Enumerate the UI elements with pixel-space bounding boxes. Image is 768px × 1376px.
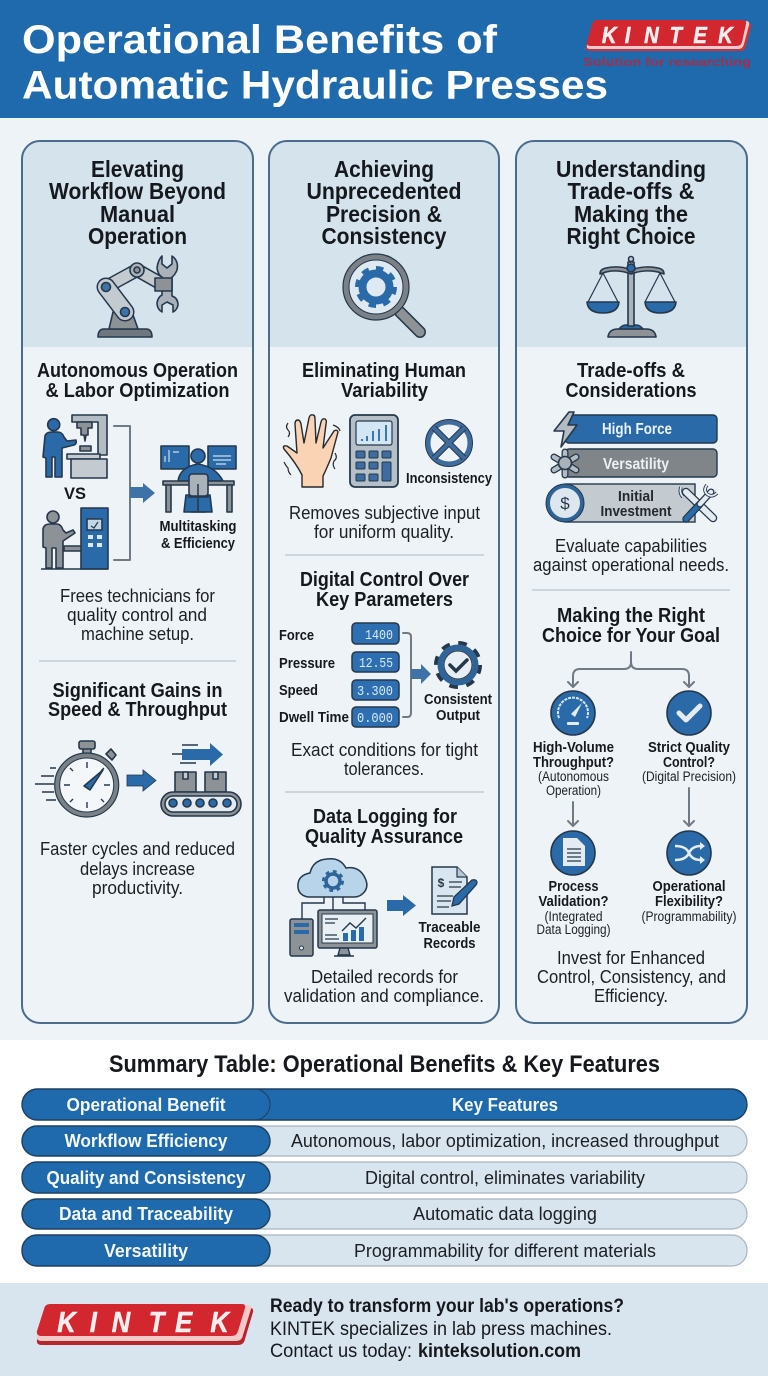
- text: removes subjective: [289, 503, 480, 542]
- table row: workflow efficiency: Workflow Efficiency: [64, 1130, 228, 1151]
- text: frees technicians: quality control and: [67, 605, 207, 625]
- title: [22, 18, 608, 108]
- arrow: stopwatch to conveyor: [127, 770, 156, 791]
- arrow: to process validation: [568, 802, 578, 826]
- heading: trade-offs: Right Choice: [566, 223, 696, 249]
- subheading: speed: Significant Gains in: [52, 680, 222, 702]
- text: evaluate: [533, 536, 729, 575]
- subheading: autonomous: & Labor Optimization: [46, 380, 230, 402]
- parameter labels and readouts: 3.300: [357, 684, 393, 700]
- panel: trade-offs: [516, 141, 747, 1023]
- text: evaluate: Evaluate capabilities: [555, 536, 707, 556]
- icon: document with pen: [432, 867, 477, 914]
- bar: high force: High Force: [602, 421, 672, 438]
- text: process validation: Data Logging): [536, 922, 610, 937]
- label: multitasking: & Efficiency: [161, 536, 235, 552]
- panel: workflow: [22, 141, 253, 1023]
- logo: KINTEK header: [583, 20, 751, 69]
- logo: KINTEK header: Solution for researching: [583, 57, 751, 69]
- subheading: digital control: Key Parameters: [316, 589, 453, 611]
- text: strict quality control: [642, 740, 736, 784]
- bar: initial investment: $: [560, 494, 570, 513]
- subheading: variability: Eliminating Human: [302, 360, 466, 382]
- text: invest: Control, Consistency, and: [537, 967, 726, 987]
- icon: multitasking desk worker: [161, 446, 236, 512]
- text: strict quality control: Control?: [663, 755, 715, 771]
- subheading: right choice: Choice for Your Goal: [542, 625, 720, 647]
- subheading: data logging: Quality Assurance: [305, 826, 463, 848]
- text: invest: Efficiency.: [594, 986, 668, 1006]
- heading: workflow: [49, 156, 226, 249]
- parameter labels and readouts: 0.000: [357, 711, 393, 727]
- label: VS: VS: [64, 484, 86, 503]
- text: faster cycles: Faster cycles and reduced: [40, 839, 235, 859]
- subheading: trade-offs: Trade-offs &: [577, 360, 685, 382]
- subheading: right choice: Making the Right: [557, 605, 705, 627]
- text: exact conditions: tolerances.: [344, 759, 424, 779]
- text: operational flexibility: (Programmability): [642, 909, 736, 924]
- arrow: to multitasking: [130, 483, 155, 503]
- heading: trade-offs: [556, 156, 706, 249]
- icon: shaky hand: [283, 415, 340, 487]
- call to action: kinteksolution.com: [418, 1341, 581, 1362]
- text: faster cycles: delays increase: [80, 859, 195, 879]
- subheading: digital control: [300, 569, 469, 611]
- bar: initial investment: Initial: [618, 488, 654, 505]
- text: frees technicians: machine setup.: [81, 624, 194, 644]
- subheading: variability: Variability: [341, 380, 429, 402]
- table row: quality and consistency: Quality and Consistency: [46, 1167, 246, 1188]
- bar: versatility: [554, 449, 717, 477]
- heading: trade-offs: Making the: [574, 201, 688, 227]
- table row: workflow efficiency: [22, 1126, 747, 1156]
- table row: data and traceability: Data and Traceability: [59, 1203, 234, 1224]
- icon: gear with check: [436, 644, 480, 686]
- summary title: Summary Table: Operational Benefits & Key Features: [109, 1051, 660, 1078]
- label: consistent output: Consistent: [424, 692, 492, 708]
- bar: high force: [554, 412, 717, 447]
- subheading: trade-offs: Considerations: [566, 380, 696, 402]
- heading: precision: Unprecedented: [306, 178, 462, 204]
- logo: KINTEK header: KINTEK: [602, 22, 734, 48]
- parameter labels and readouts: Pressure: [279, 656, 335, 672]
- icon: balance scale: [587, 256, 676, 337]
- icon: document: [551, 831, 595, 875]
- decision brace arrows: [568, 652, 694, 687]
- parameter labels and readouts: [279, 623, 399, 727]
- icon: crossed circle: [426, 420, 472, 466]
- text: exact conditions: [291, 740, 478, 779]
- text: high-volume throughput: Throughput?: [533, 755, 614, 771]
- heading: precision: Achieving: [334, 156, 434, 182]
- arrow: to records: [387, 895, 416, 916]
- text: high-volume throughput: [533, 740, 614, 798]
- table row: data and traceability: [22, 1199, 747, 1229]
- parameter labels and readouts: Force: [279, 628, 314, 644]
- subheading: autonomous: [37, 360, 238, 402]
- text: removes subjective: for uniform quality.: [314, 522, 454, 542]
- text: exact conditions: Exact conditions for tight: [291, 740, 478, 760]
- icon: gauge: [551, 691, 595, 735]
- header band: [0, 0, 768, 118]
- text: process validation: (Integrated: [544, 909, 602, 924]
- call to action: [270, 1296, 624, 1362]
- parameter labels and readouts: Dwell Time: [279, 710, 349, 726]
- parameter labels and readouts: 1400: [365, 628, 393, 644]
- call to action: Contact us today:: [270, 1341, 412, 1362]
- logo: KINTEK footer: [37, 1304, 253, 1345]
- label: multitasking: [160, 519, 236, 552]
- table row: data and traceability: Automatic data logging: [413, 1203, 597, 1224]
- bar: versatility: Versatility: [603, 456, 669, 473]
- bar: initial investment: [546, 484, 717, 522]
- label: consistent output: Output: [436, 708, 480, 724]
- subheading: data logging: Data Logging for: [313, 806, 457, 828]
- text: faster cycles: productivity.: [92, 878, 183, 898]
- text: detailed records: validation and compliance.: [284, 986, 484, 1006]
- subheading: variability: [302, 360, 466, 402]
- logo: KINTEK footer: KINTEK: [57, 1305, 231, 1338]
- parameter labels and readouts: Speed: [279, 683, 318, 699]
- call to action: KINTEK specializes in lab press machines.: [270, 1319, 612, 1340]
- text: evaluate: against operational needs.: [533, 555, 729, 575]
- heading: workflow: Elevating: [91, 156, 184, 182]
- text: strict quality control: (Digital Precision): [642, 769, 736, 784]
- table header row: Key Features: [452, 1094, 558, 1115]
- icon: shuffle: [667, 831, 711, 875]
- label: traceable records: Records: [424, 936, 476, 952]
- arrow: to operational flexibility: [684, 788, 694, 826]
- heading: trade-offs: Understanding: [556, 156, 706, 182]
- text: operational flexibility: Flexibility?: [655, 894, 723, 910]
- label: traceable records: Traceable: [418, 920, 480, 936]
- text: detailed records: [284, 967, 484, 1006]
- title: Operational Benefits of: [22, 18, 498, 62]
- icon: magnifier with gear: [343, 254, 420, 332]
- label: consistent output: [424, 692, 492, 724]
- heading: workflow: Manual: [100, 201, 175, 227]
- text: process validation: Process: [548, 879, 598, 895]
- text: process validation: Validation?: [538, 894, 609, 910]
- subheading: autonomous: Autonomous Operation: [37, 360, 238, 382]
- table row: versatility: Programmability for different materials: [354, 1240, 656, 1261]
- text: frees technicians: [60, 586, 215, 644]
- table row: quality and consistency: [22, 1162, 747, 1193]
- bracket: [403, 633, 411, 717]
- table header row: Operational Benefit: [66, 1094, 226, 1115]
- text: high-volume throughput: High-Volume: [533, 740, 614, 756]
- heading: precision: [306, 156, 462, 249]
- table header row: [22, 1089, 747, 1120]
- summary section: [0, 1040, 768, 1283]
- table row: versatility: Versatility: [104, 1240, 189, 1261]
- subheading: speed: [48, 680, 227, 721]
- text: frees technicians: Frees technicians for: [60, 586, 215, 606]
- table row: workflow efficiency: Autonomous, labor optimization, increased throughput: [291, 1130, 719, 1151]
- heading: precision: Consistency: [322, 223, 447, 249]
- heading: workflow: Operation: [88, 223, 187, 249]
- title: Automatic Hydraulic Presses: [22, 64, 608, 108]
- bar: initial investment: Investment: [600, 503, 672, 520]
- label: multitasking: Multitasking: [160, 519, 236, 535]
- call to action: Ready to transform your lab's operations?: [270, 1296, 624, 1317]
- table row: quality and consistency: Digital control, eliminates variability: [365, 1167, 646, 1188]
- label: inconsistency: Inconsistency: [406, 471, 492, 487]
- icon: cloud with computer: [290, 859, 377, 956]
- footer band: [0, 1283, 768, 1376]
- parameter labels and readouts: 12.55: [359, 656, 393, 672]
- panel: precision: [269, 141, 499, 1023]
- icon: operator with manual machine: [43, 415, 107, 478]
- heading: workflow: Workflow Beyond: [49, 178, 226, 204]
- text: faster cycles: [40, 839, 235, 898]
- subheading: trade-offs: [566, 360, 696, 402]
- icon: calculator: [350, 415, 398, 487]
- text: removes subjective: Removes subjective input: [289, 503, 480, 523]
- subheading: digital control: Digital Control Over: [300, 569, 469, 591]
- subheading: data logging: [305, 806, 463, 848]
- subheading: right choice: [542, 605, 720, 647]
- text: invest: [537, 948, 726, 1006]
- heading: trade-offs: Trade-offs &: [568, 178, 694, 204]
- text: process validation: [536, 879, 610, 937]
- subheading: speed: Speed & Throughput: [48, 699, 227, 721]
- label: traceable records: [418, 920, 480, 952]
- text: detailed records: Detailed records for: [311, 967, 458, 987]
- icon: check badge: [667, 691, 711, 735]
- text: high-volume throughput: (Autonomous: [538, 769, 609, 784]
- icon: conveyor with boxes: [161, 743, 241, 816]
- icon: stopwatch: [35, 741, 119, 817]
- icon: document with pen: $: [438, 876, 445, 890]
- bracket: [114, 426, 130, 560]
- text: operational flexibility: Operational: [652, 879, 726, 895]
- text: operational flexibility: [642, 879, 736, 924]
- table row: versatility: [22, 1235, 747, 1266]
- heading: precision: Precision &: [326, 201, 442, 227]
- arrow: to consistent output: [411, 664, 431, 684]
- text: invest: Invest for Enhanced: [557, 948, 705, 968]
- text: high-volume throughput: Operation): [546, 783, 601, 798]
- icon: robot arm with wrench: [98, 256, 178, 337]
- icon: operator with automatic machine: [41, 508, 108, 569]
- text: strict quality control: Strict Quality: [648, 740, 730, 756]
